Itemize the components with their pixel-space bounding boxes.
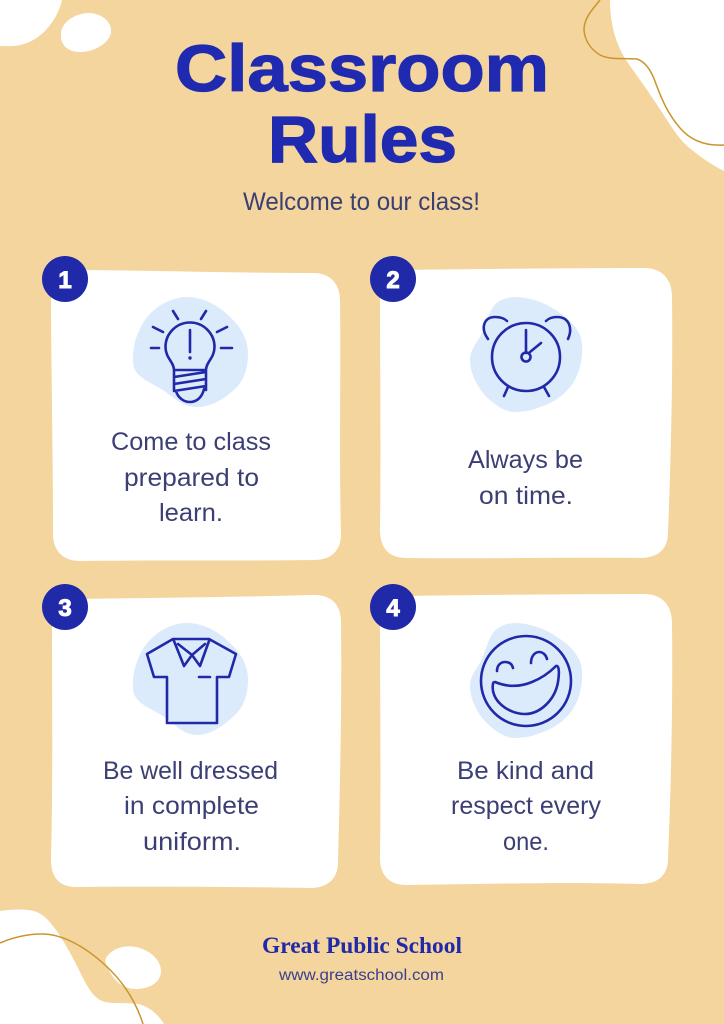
number badge 1: [42, 256, 88, 302]
number badge 3: 3: [58, 595, 72, 622]
number badge 3: [42, 584, 88, 630]
title: Classroom: [175, 31, 549, 105]
rule 3 text: uniform.: [143, 828, 241, 856]
decoration: top left blobs: [0, 0, 111, 52]
card 2 background: [380, 268, 672, 558]
number badge 4: [370, 584, 416, 630]
rule 1 text: Come to class: [111, 428, 271, 456]
card 1 background: [51, 270, 341, 561]
number badge 1: 1: [58, 267, 72, 294]
panel: rule 2: [370, 256, 672, 558]
rule 3 text: in complete: [124, 792, 259, 820]
rule 1 text: learn.: [159, 499, 223, 527]
rule 4 text: respect every: [451, 792, 601, 820]
card 3 background: [51, 595, 341, 888]
panel: rule 1: [42, 256, 341, 561]
rule 4 text: Be kind and: [457, 757, 594, 785]
panel: rule 4: [370, 584, 672, 885]
number badge 2: 2: [386, 267, 400, 294]
icon: alarm clock: [470, 297, 582, 412]
icon: smiling face: [470, 623, 582, 738]
rule 3 text: Be well dressed: [103, 757, 278, 785]
panel: rule 3: [42, 584, 341, 888]
rule 1 text: prepared to: [124, 464, 259, 492]
rule 3 text: [103, 757, 278, 856]
footer: school name: Great Public School: [262, 933, 462, 958]
decoration: top right blob and gold line: [584, 0, 724, 171]
title: Rules: [268, 102, 457, 176]
icon: light bulb: [133, 297, 248, 407]
number badge 2: [370, 256, 416, 302]
rule 1 text: [111, 428, 271, 527]
subtitle: Welcome to our class!: [243, 188, 480, 216]
decoration: bottom left blobs and gold line: [0, 910, 164, 1024]
rule 4 text: [451, 757, 601, 856]
footer: website: www.greatschool.com: [278, 967, 444, 984]
number badge 4: 4: [386, 595, 400, 622]
rule 2 text: [468, 446, 583, 510]
card 4 background: [380, 594, 672, 885]
rule 2 text: on time.: [479, 482, 573, 510]
title: [175, 31, 549, 176]
icon: polo shirt: [133, 623, 248, 735]
rule 4 text: one.: [503, 828, 549, 856]
rule 2 text: Always be: [468, 446, 583, 474]
